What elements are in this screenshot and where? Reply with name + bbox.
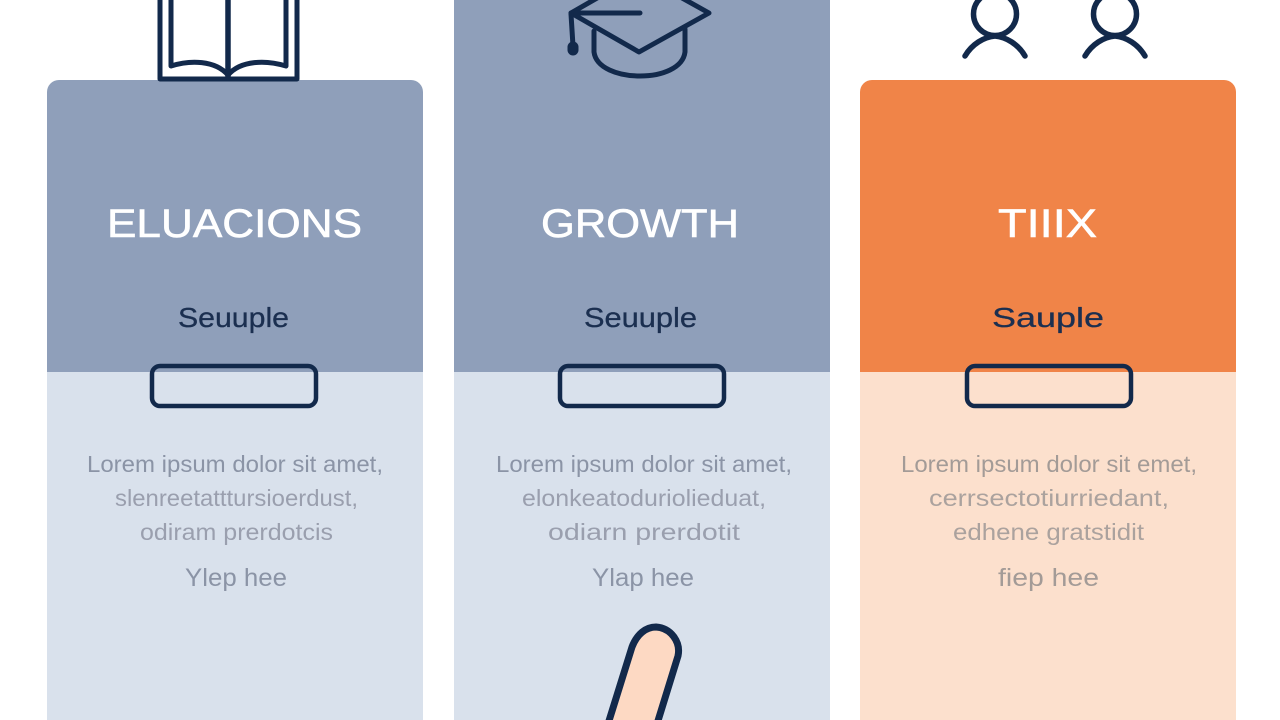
icon: graduation cap: [571, 0, 709, 76]
body text: [496, 451, 792, 545]
footer text: fiep hee: [998, 564, 1099, 592]
icon: pointing finger: [608, 627, 679, 720]
panel body background: [454, 372, 830, 720]
icon: two people: [965, 0, 1145, 56]
panel body background: [47, 372, 423, 720]
body text: [901, 451, 1197, 545]
body text: Lorem ipsum dolor sit amet,: [496, 451, 792, 477]
icon: open book: [160, 0, 297, 79]
panel header background: [860, 80, 1236, 372]
heading: ELUACIONS: [107, 202, 362, 246]
subheading: Seuuple: [178, 302, 289, 333]
panel: orange: [860, 0, 1236, 720]
body text: Lorem ipsum dolor sit amet,: [87, 451, 383, 477]
subheading: Seuuple: [584, 302, 697, 333]
footer text: Ylap hee: [592, 564, 694, 592]
outlined button: [560, 366, 724, 406]
panel header background: [47, 80, 423, 372]
outlined button: [967, 366, 1131, 406]
body text: slenreetatttursioerdust,: [115, 485, 358, 511]
panel: growth: [454, 0, 830, 720]
body text: edhene gratstidit: [953, 519, 1145, 545]
footer text: Ylep hee: [185, 564, 287, 592]
body text: odiarn prerdotit: [548, 519, 741, 545]
panel: education: [47, 0, 423, 720]
body text: cerrsectotiurriedant,: [929, 485, 1169, 511]
body text: elonkeatoduriolieduat,: [522, 485, 766, 511]
body text: Lorem ipsum dolor sit emet,: [901, 451, 1197, 477]
body text: [87, 451, 383, 545]
panel body background: [860, 372, 1236, 720]
subheading: Sauple: [992, 302, 1104, 333]
body text: odiram prerdotcis: [140, 519, 333, 545]
panel header background: [454, 0, 830, 372]
heading: GROWTH: [541, 202, 739, 246]
heading: TIIIX: [998, 202, 1097, 246]
outlined button: [152, 366, 316, 406]
